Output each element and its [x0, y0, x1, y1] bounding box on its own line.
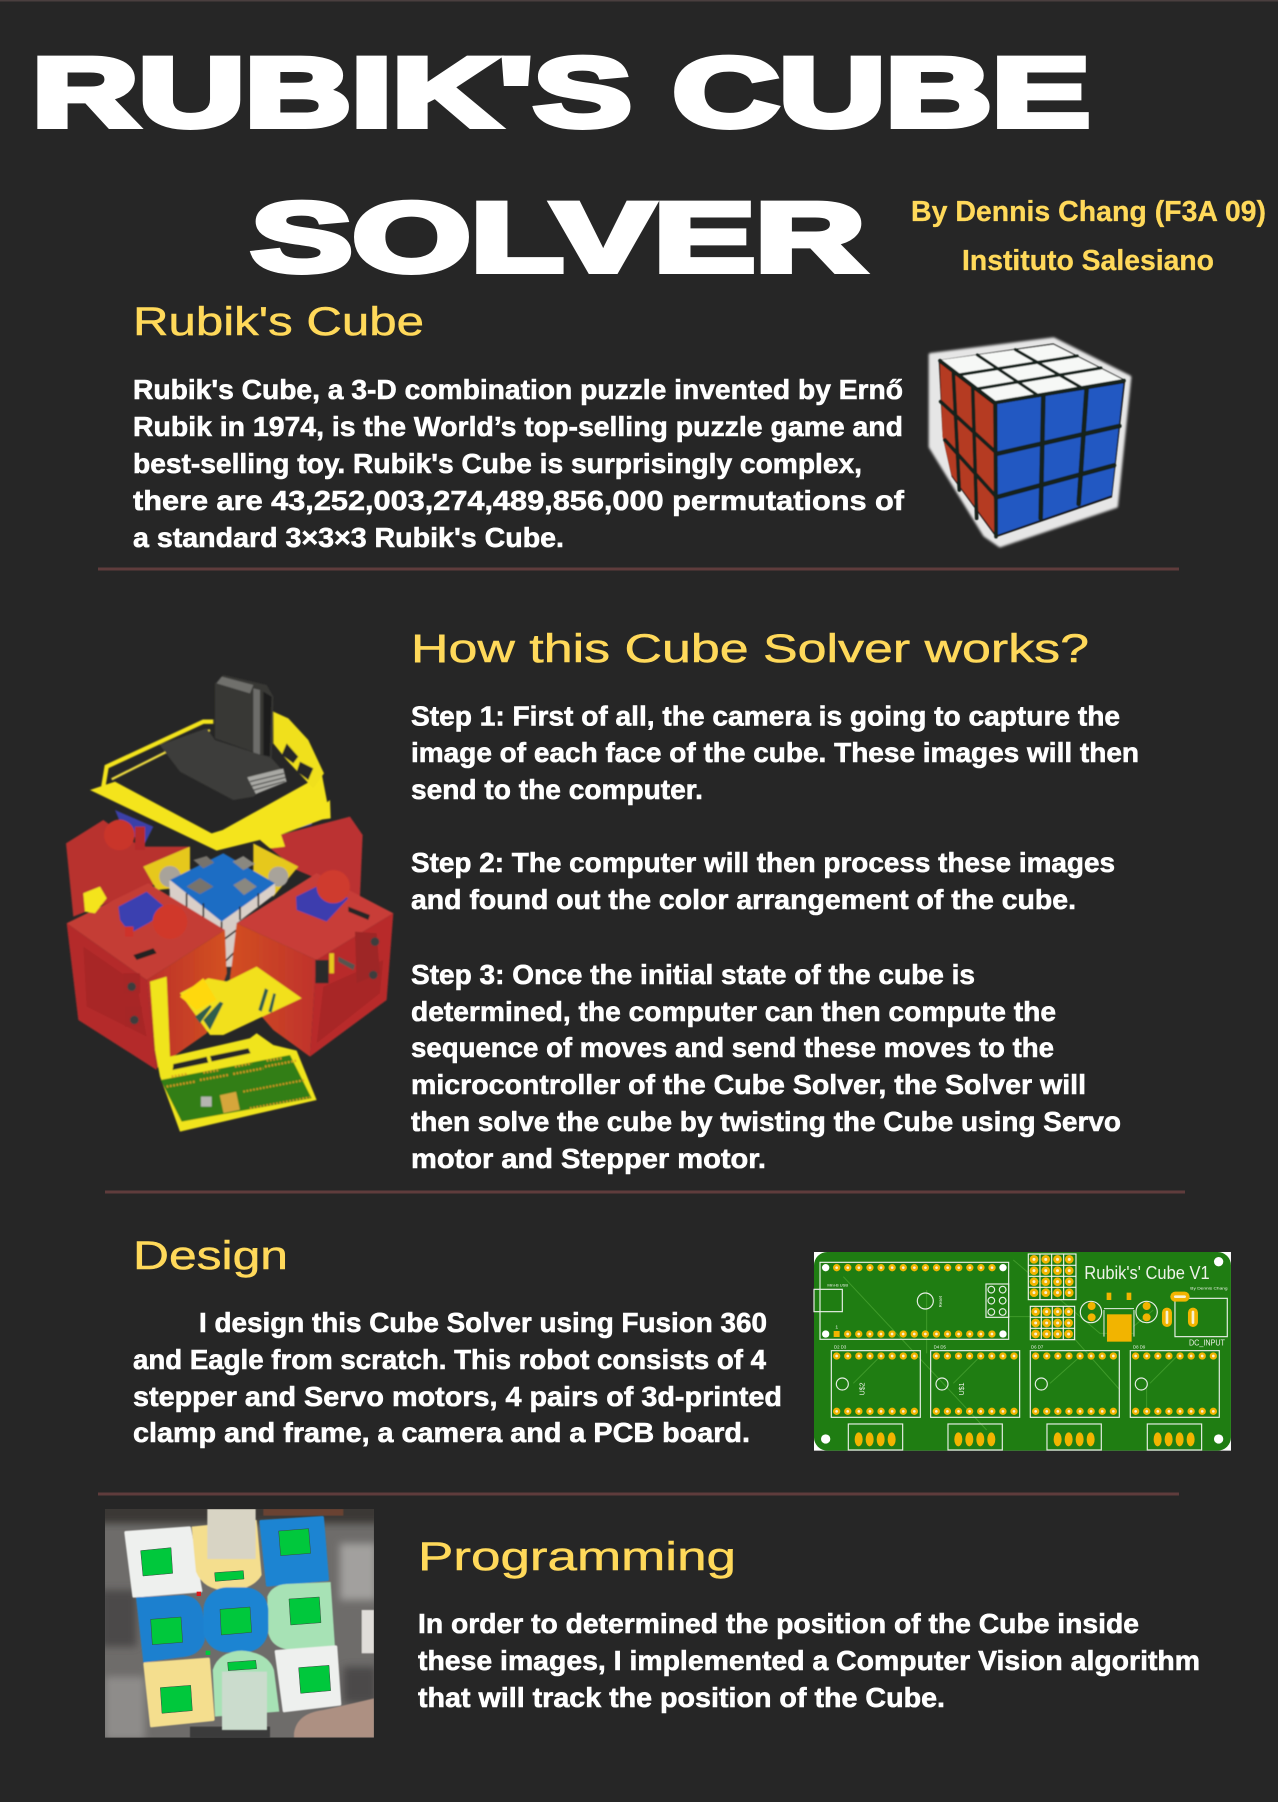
image: computer vision tracking of the cube	[97, 1500, 383, 1740]
panel: Rubik's Cube intro	[133, 300, 1129, 553]
white tile bottom right	[276, 1647, 340, 1711]
text block: intro paragraph: Rubik in 1974, is the World’s top-selling puzzle game and	[133, 411, 903, 442]
board labels: By Dennis Chang	[1190, 1286, 1228, 1291]
panel: How this Cube Solver works	[66, 627, 1139, 1174]
title: SOLVER	[251, 182, 865, 292]
text block: step 2: and found out the color arrangement of the cube.	[411, 884, 1076, 915]
clamps	[207, 1509, 256, 1559]
text block: step 3: microcontroller of the Cube Solver, the Solver will	[411, 1069, 1086, 1100]
heading: How this Cube Solver works: How this Cube Solver works?	[411, 627, 1089, 671]
panel: Programming	[97, 1500, 1200, 1740]
heading: Rubik's Cube: Rubik's Cube	[133, 300, 424, 344]
image: PCB board	[814, 1252, 1231, 1451]
text block: step 1	[411, 700, 1139, 805]
blue tile left	[136, 1595, 205, 1663]
yellow tile bottom left	[145, 1659, 213, 1726]
board labels: D4 D5	[934, 1344, 947, 1349]
cube inside frame	[169, 881, 275, 930]
board labels	[827, 1262, 1228, 1395]
board labels: Rubik's' Cube V1	[1084, 1262, 1210, 1283]
text block: design paragraph: stepper and Servo motors, 4 pairs of 3d-printed	[133, 1381, 782, 1412]
board labels: U$1	[959, 1382, 966, 1395]
board labels: U$2	[859, 1382, 866, 1395]
front bracket and PCB	[180, 967, 302, 1035]
text block: step 2	[411, 847, 1115, 915]
icon: Rubik's cube	[931, 339, 1129, 545]
front right box	[237, 873, 393, 960]
illustration: cube solver robot	[66, 675, 393, 1132]
text block: step 3	[411, 959, 1121, 1174]
green tile right	[267, 1582, 335, 1649]
header grids	[1028, 1254, 1076, 1340]
board labels: D8 D9	[1133, 1344, 1146, 1349]
blue tile top right	[261, 1518, 327, 1585]
board labels: D6 D7	[1031, 1344, 1044, 1349]
text block: step 1: send to the computer.	[411, 774, 703, 805]
text block: step 1: image of each face of the cube. These images will then	[411, 737, 1139, 768]
camera	[215, 675, 273, 758]
tracked green markers	[141, 1529, 331, 1713]
yellow frame rails	[103, 722, 213, 787]
board labels: DC_INPUT	[1189, 1337, 1225, 1347]
connector pads	[855, 1292, 1198, 1446]
byline: By Dennis Chang (F3A 09)	[911, 196, 1266, 228]
text block: programming paragraph: that will track the position of the Cube.	[418, 1682, 945, 1713]
pad rows	[837, 1268, 1214, 1411]
text block: step 3: then solve the cube by twisting the Cube using Servo	[411, 1106, 1121, 1137]
text block: step 3: sequence of moves and send these moves to the	[411, 1032, 1054, 1063]
text block: programming paragraph: these images, I implemented a Computer Vision algorithm	[418, 1645, 1200, 1676]
text block: design paragraph	[133, 1307, 782, 1448]
text block: step 2: Step 2: The computer will then process these images	[411, 847, 1115, 878]
board labels: D2 D3	[834, 1344, 847, 1349]
board labels: 1	[835, 1324, 838, 1330]
board labels: Mini-B USB	[827, 1283, 849, 1287]
text block: programming paragraph	[418, 1608, 1200, 1713]
text block: design paragraph: I design this Cube Solver using Fusion 360	[199, 1307, 767, 1338]
heading: Design: Design	[133, 1234, 288, 1278]
byline	[911, 196, 1266, 277]
yellow tile top	[192, 1520, 262, 1591]
text block: intro paragraph: Rubik's Cube, a 3-D combination puzzle invented by Ernő	[133, 374, 903, 405]
text block: intro paragraph: a standard 3×3×3 Rubik's Cube.	[133, 522, 564, 553]
text block: programming paragraph: In order to determined the position of the Cube inside	[418, 1608, 1139, 1639]
title: RUBIK'S CUBE	[32, 37, 1090, 147]
text block: design paragraph: and Eagle from scratch. This robot consists of 4	[133, 1344, 767, 1375]
byline: Instituto Salesiano	[962, 245, 1214, 277]
green tile bottom	[213, 1651, 279, 1717]
text block: intro paragraph: there are 43,252,003,274,489,856,000 permutations of	[133, 485, 905, 516]
text block: step 1: Step 1: First of all, the camera is going to capture the	[411, 700, 1120, 732]
white tile top left	[126, 1528, 201, 1596]
text block: intro paragraph	[133, 374, 905, 553]
text block: intro paragraph: best-selling toy. Rubik's Cube is surprisingly complex,	[133, 448, 862, 479]
panel: Design	[133, 1234, 1231, 1451]
text block: step 3: determined, the computer can then compute the	[411, 996, 1056, 1027]
text block: step 3: Step 3: Once the initial state of the cube is	[411, 959, 975, 990]
board labels: Reset	[938, 1295, 943, 1307]
text block: design paragraph: clamp and frame, a camera and a PCB board.	[133, 1417, 750, 1448]
blue tile centre	[203, 1587, 268, 1652]
front left box	[67, 883, 225, 980]
title	[32, 37, 1090, 292]
text block: step 3: motor and Stepper motor.	[411, 1143, 766, 1174]
heading: Programming: Programming	[418, 1535, 736, 1579]
